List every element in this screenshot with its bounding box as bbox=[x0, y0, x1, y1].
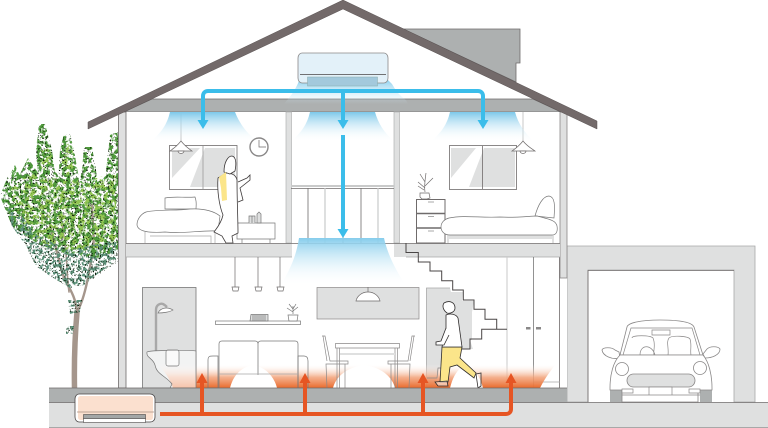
lower ceiling line bbox=[126, 256, 560, 258]
lower right wall line bbox=[558, 257, 560, 388]
man trousers bbox=[440, 347, 476, 382]
car bbox=[602, 320, 720, 402]
staircase bbox=[406, 243, 507, 349]
side table bbox=[237, 212, 275, 243]
car wheels bbox=[610, 385, 712, 402]
pendant lamp bbox=[170, 112, 192, 154]
main blue duct bbox=[203, 91, 483, 120]
warm air zones bbox=[158, 364, 556, 388]
bedroom window bbox=[450, 146, 516, 190]
unit body bbox=[75, 394, 155, 422]
potted plant bbox=[418, 173, 433, 199]
main red duct bbox=[160, 381, 511, 414]
door panel bbox=[142, 288, 196, 388]
woman bbox=[214, 156, 250, 243]
red warm air arrows bbox=[160, 373, 516, 414]
foundation band bbox=[49, 388, 567, 402]
cold zone from indoor unit bbox=[284, 78, 408, 104]
right outer wall bbox=[560, 112, 567, 278]
man arm bbox=[436, 328, 449, 345]
chimney bbox=[403, 29, 520, 82]
garage frame bbox=[567, 246, 755, 402]
shelf plant bbox=[287, 304, 298, 321]
blue arrowheads bbox=[198, 120, 488, 129]
garage bbox=[567, 246, 755, 402]
walking man bbox=[435, 302, 481, 388]
floor line bbox=[126, 242, 560, 244]
sofa bed bbox=[441, 196, 557, 243]
woman scarf bbox=[219, 172, 227, 201]
gallery railing bbox=[291, 186, 394, 243]
floor slab right bbox=[394, 244, 560, 257]
dining table bbox=[336, 344, 400, 388]
car mirrors bbox=[602, 347, 720, 359]
unit louver bbox=[308, 77, 378, 86]
dining pendant lamp bbox=[356, 287, 380, 301]
lower blue arrowhead bbox=[338, 229, 348, 238]
lower cold zone bbox=[280, 238, 406, 286]
books bbox=[250, 314, 268, 321]
sofa bbox=[208, 341, 308, 388]
upper cold zones bbox=[150, 112, 535, 142]
unit seam bbox=[77, 411, 154, 413]
tree trunk and branches bbox=[50, 205, 94, 388]
wardrobe bbox=[507, 257, 560, 388]
ceiling band bbox=[124, 99, 561, 112]
upper inner wall 1 bbox=[286, 112, 292, 243]
red risers bbox=[202, 381, 423, 414]
window panel bbox=[317, 288, 419, 319]
lower blue arrow bbox=[341, 135, 345, 231]
ground lines bbox=[49, 388, 768, 402]
upstairs indoor air conditioner bbox=[298, 53, 388, 86]
dresser bbox=[416, 200, 445, 243]
bed bbox=[137, 197, 220, 243]
armchair bbox=[147, 350, 196, 388]
ground bbox=[49, 388, 768, 428]
bedroom window bbox=[170, 146, 237, 190]
house walls and interior bbox=[118, 9, 567, 388]
red arrowheads bbox=[196, 373, 516, 383]
cooling air zones bbox=[150, 78, 535, 286]
unit louver bbox=[84, 414, 146, 422]
ground slab bbox=[49, 402, 768, 428]
stair panel outline bbox=[426, 288, 450, 388]
tree foliage bbox=[0, 124, 118, 334]
stair wall panel bbox=[426, 288, 474, 388]
man torso bbox=[442, 314, 462, 347]
panel: living room bbox=[142, 243, 560, 388]
man shoes bbox=[435, 373, 481, 388]
woman dress bbox=[214, 173, 238, 243]
floor slab left bbox=[126, 244, 292, 257]
house gable bbox=[124, 9, 561, 112]
lower stair steps bbox=[427, 368, 445, 378]
car headlights bbox=[616, 362, 628, 376]
unit warm fill bbox=[78, 396, 153, 420]
pendant lamp bbox=[512, 112, 535, 154]
wall clock bbox=[250, 138, 268, 156]
tree bbox=[0, 124, 118, 388]
garage opening top edge bbox=[588, 270, 734, 402]
left outer wall bbox=[118, 112, 126, 388]
car windshield and seats bbox=[623, 328, 700, 355]
car cabin bbox=[620, 320, 703, 355]
man head bbox=[443, 302, 455, 313]
upper inner wall 2 bbox=[394, 112, 400, 243]
unit body bbox=[298, 53, 388, 83]
underfloor air conditioner bbox=[75, 394, 155, 422]
roof bbox=[88, 0, 597, 129]
woman hair and head bbox=[224, 156, 236, 174]
car bumper plate bbox=[622, 387, 700, 395]
unit seam bbox=[300, 74, 386, 76]
interior white bbox=[118, 112, 567, 388]
panel: left bedroom bbox=[137, 112, 275, 243]
blue cold air arrows bbox=[198, 91, 488, 238]
wall shelf bbox=[216, 304, 300, 324]
floor lamp bbox=[156, 304, 173, 351]
pendant lights bbox=[232, 257, 284, 291]
car grille bbox=[627, 374, 695, 387]
ground bottom line bbox=[49, 426, 768, 428]
panel: right bedroom bbox=[416, 112, 557, 243]
dining chairs bbox=[322, 336, 415, 388]
car body bbox=[610, 355, 712, 402]
woman arm bbox=[238, 175, 250, 202]
center blue drop bbox=[341, 91, 345, 122]
